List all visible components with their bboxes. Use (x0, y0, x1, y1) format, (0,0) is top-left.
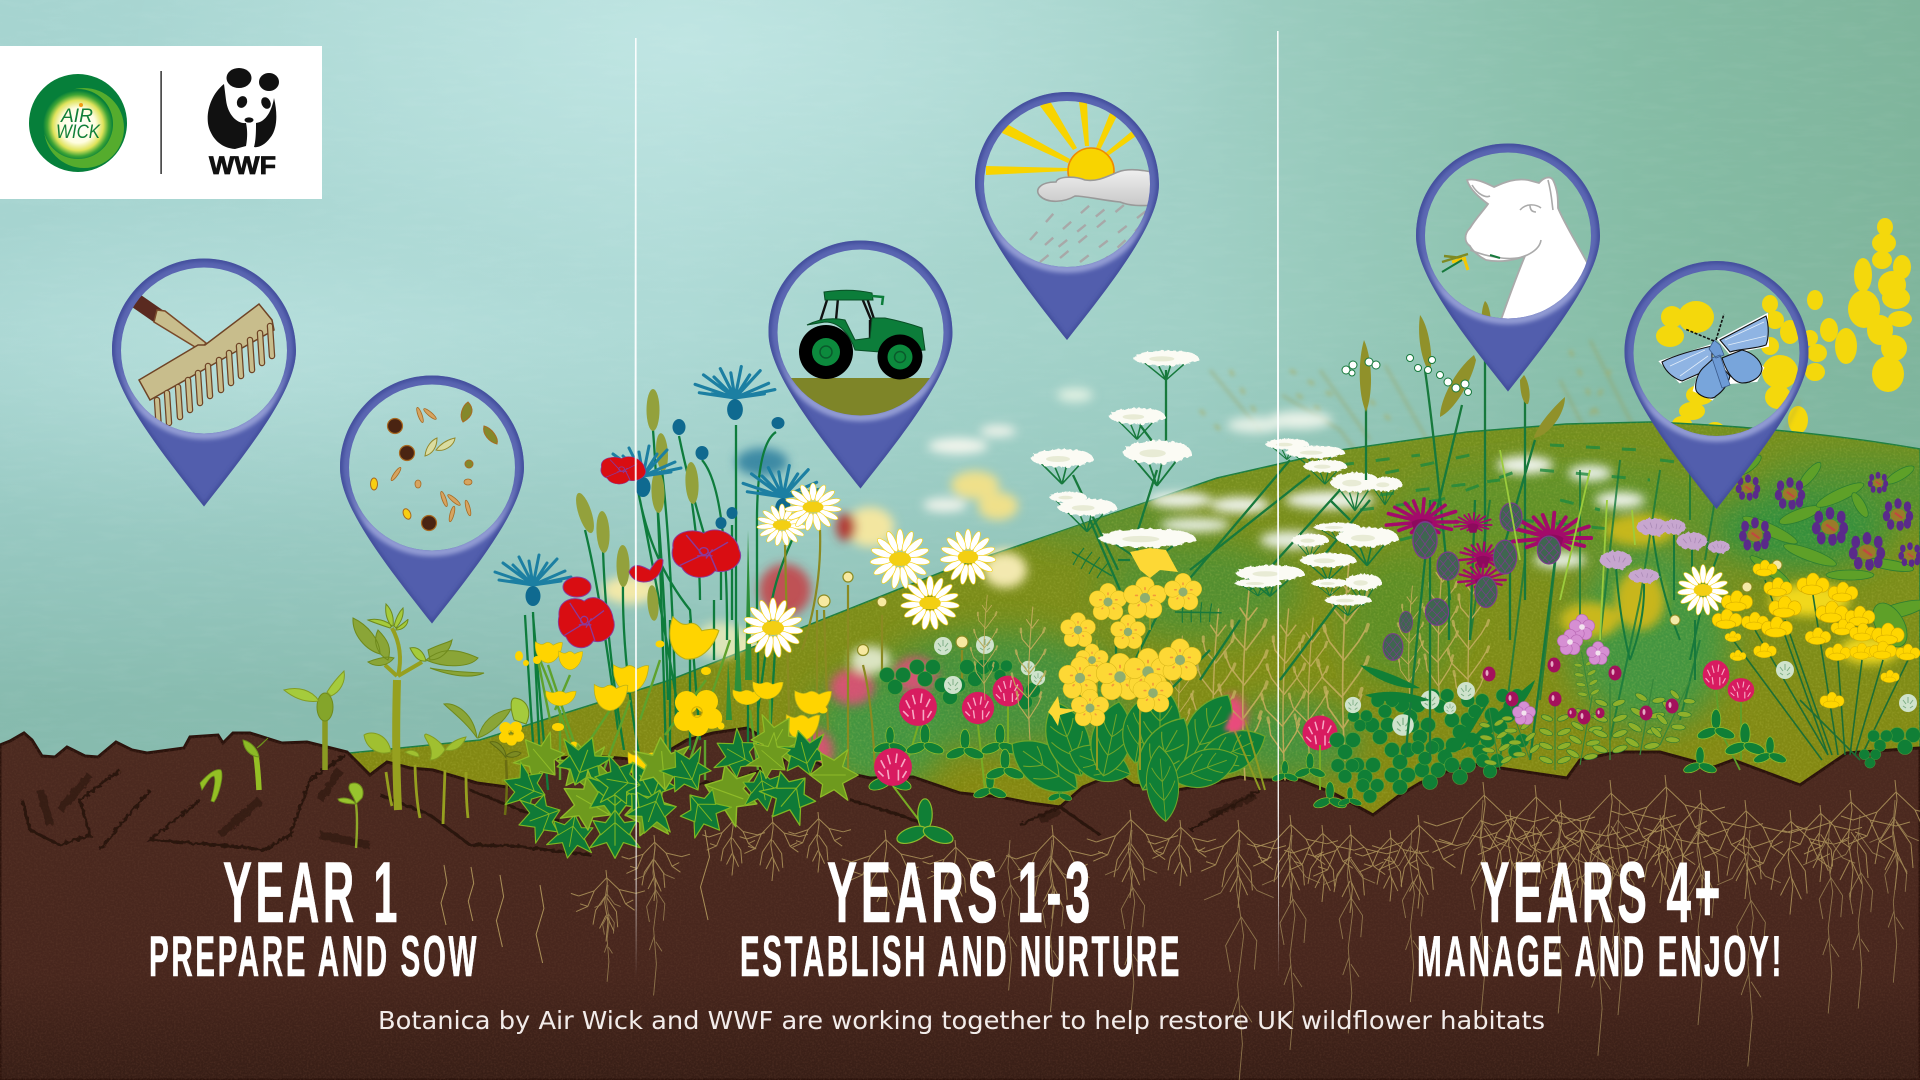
clover patch, centre (867, 636, 1073, 847)
panel dividers (635, 31, 1279, 977)
hillside (340, 420, 1920, 820)
WWF panda logo: WWF (209, 152, 276, 180)
low two-leaf seedlings (364, 698, 529, 824)
self-heal patch and leaves (1736, 452, 1920, 653)
magenta buds (1482, 658, 1678, 724)
distant tan grasses, blurred (1200, 340, 1800, 470)
heading: Years 1-3, establish and nurture (740, 845, 1182, 989)
sprout: small two-leaf (338, 783, 363, 848)
reeds and meadow stems, right section (1342, 301, 1591, 760)
blurred background flowers on the sky (602, 388, 1332, 668)
sprout: budding stem (284, 671, 344, 770)
palmate leaves (496, 706, 858, 862)
pink clover with leaves, right (1682, 660, 1920, 775)
icon: blue butterfly (1662, 314, 1768, 398)
small white flower clusters (1342, 354, 1472, 396)
primroses and big leaves (1000, 548, 1273, 823)
Air Wick logo (29, 74, 127, 172)
tan grasses, centre (971, 558, 1489, 780)
pin 1: rake (112, 258, 296, 506)
primrose leaves (1000, 684, 1273, 823)
WWF panda logo (208, 68, 279, 180)
pin 3: tractor (768, 240, 952, 488)
white clover heads (934, 636, 1045, 694)
heading: Year 1, prepare and sow (149, 845, 479, 989)
centre-right clover mat (1271, 682, 1529, 810)
pin 2: seeds (340, 376, 524, 624)
left meadow: stems and reeds (495, 366, 996, 862)
heading: Years 4+, manage and enjoy (1417, 845, 1784, 989)
tall yellow flowers, far right (1656, 218, 1912, 438)
white umbels and their stems (1031, 350, 1402, 730)
vetch (1474, 650, 1705, 773)
cornflowers (495, 366, 823, 606)
knapweed buds and flowers (1383, 499, 1591, 660)
right meadow: scabious, geranium, vetch (1474, 450, 1782, 773)
scabious (1600, 518, 1730, 583)
poppies (558, 457, 741, 648)
red clover heads (874, 676, 1023, 786)
heading: Years 1-3, establish and nurture: ESTABLISH AND NURTURE (740, 925, 1182, 989)
daisies (743, 483, 996, 658)
icon: seeds (370, 402, 497, 530)
heading: Year 1, prepare and sow: PREPARE AND SOW (149, 925, 479, 989)
pin 6: butterfly (1624, 261, 1808, 509)
icon: tractor (791, 290, 930, 416)
Air Wick logo: WICK (56, 122, 101, 143)
cornflower buds (672, 417, 784, 529)
icon: sun, cloud and rain (986, 101, 1158, 264)
daisy buds (818, 572, 968, 656)
pin 5: sheep (1416, 144, 1620, 392)
icon: sheep (1442, 176, 1587, 318)
reed heads (572, 389, 700, 621)
primrose flowers (1048, 548, 1202, 726)
logo panel (0, 46, 322, 199)
geraniums (1512, 614, 1610, 724)
footer text: Botanica by Air Wick and WWF are working together to help restore UK wildflower habitats (378, 1006, 1545, 1035)
logo divider (160, 71, 162, 174)
Air Wick logo: AIR (60, 106, 93, 127)
dark leaf blades (1360, 665, 1535, 755)
sprout: bent shoot (200, 770, 222, 802)
short green grass marks on the hill (1340, 445, 1740, 540)
soil (0, 720, 1920, 1080)
pin 4: sun and rain (975, 92, 1159, 340)
buttercups (499, 617, 832, 779)
heading: Years 1-3, establish and nurture: YEARS 1-3 (827, 845, 1094, 941)
roots under the flowers (441, 775, 1920, 1080)
tall sapling (353, 604, 484, 810)
heading: Year 1, prepare and sow: YEAR 1 (223, 845, 401, 941)
sprout: young seedling (243, 738, 268, 790)
oxeye daisy (1677, 564, 1729, 616)
seedlings, year 1 (200, 604, 529, 848)
icon: rake (135, 300, 274, 430)
bird's-foot trefoil cluster (1712, 560, 1920, 760)
soil cracks (22, 755, 1260, 855)
grass blades (726, 530, 752, 720)
